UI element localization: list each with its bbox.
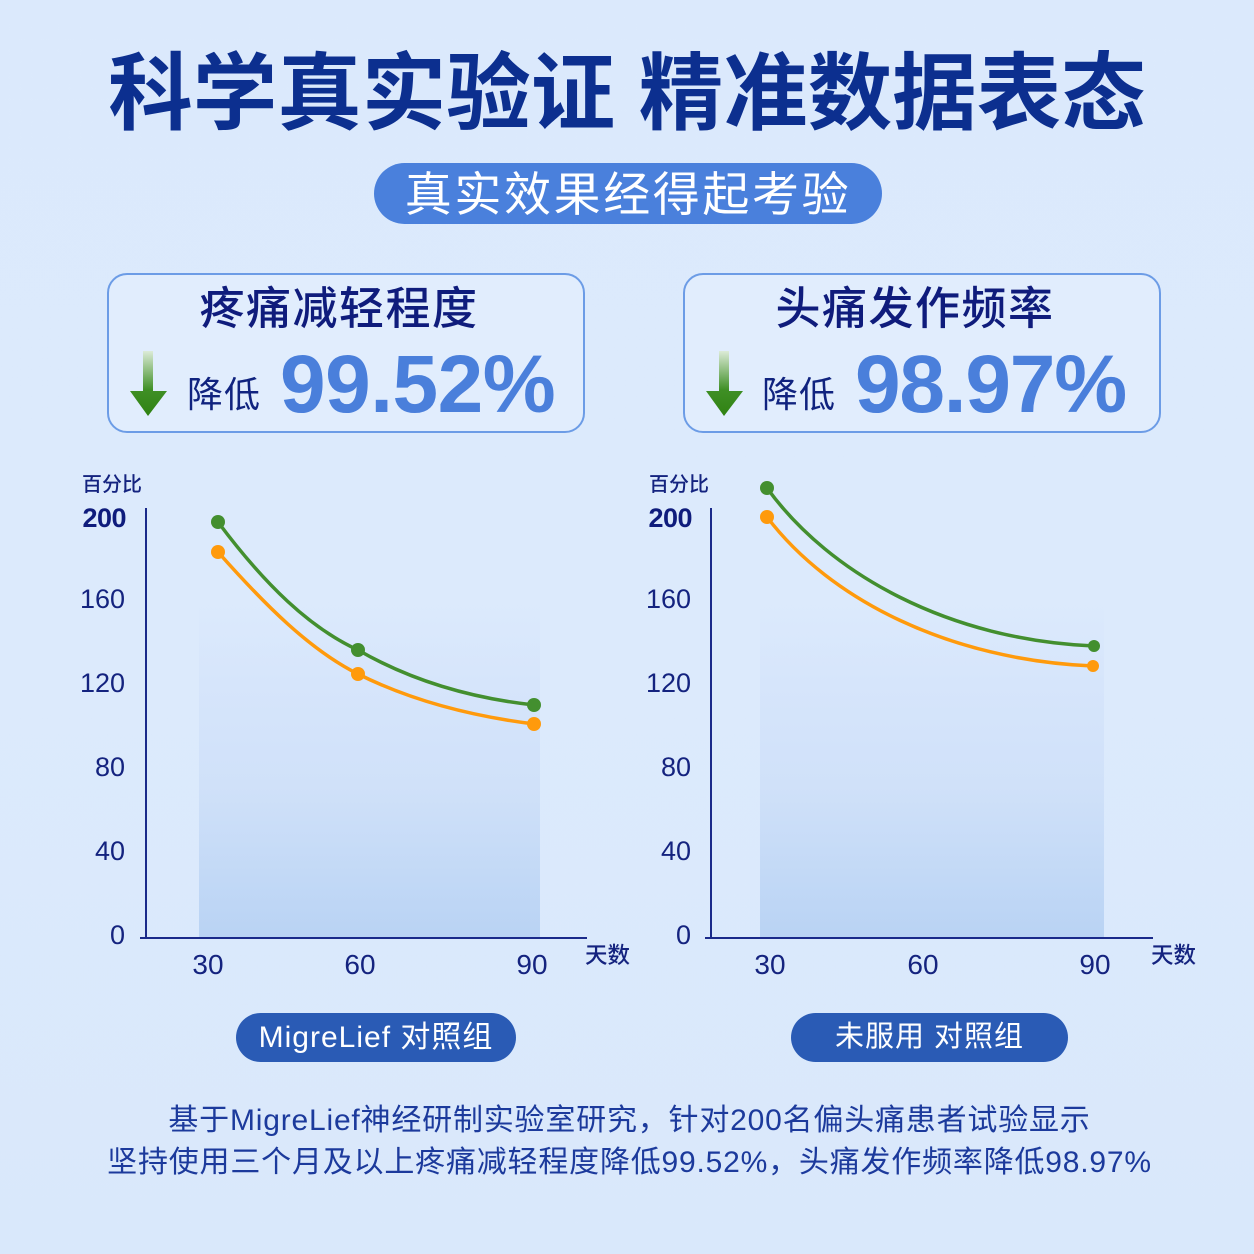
y axis labels: 200 [648,503,692,533]
panel: headache frequency [683,273,1161,433]
axes [140,508,587,938]
subtitle pill: 真实效果经得起考验 [405,168,851,221]
axes [705,508,1153,938]
green curve [760,481,1100,652]
chart: left [80,473,630,980]
reduce label: 降低 [762,374,836,415]
footnote: 基于MigreLief神经研制实验室研究，针对200名偏头痛患者试验显示 [168,1104,1091,1137]
y axis labels: 80 [661,752,691,782]
legend pill: untreated: 未服用 对照组 [835,1021,1024,1053]
panel heading: 头痛发作频率 [775,283,1054,334]
y axis labels [646,503,692,950]
icon: down arrow [130,351,167,416]
reduce label: 降低 [187,374,261,415]
x axis labels: 30 [754,949,786,980]
orange curve [760,510,1099,672]
panel: pain reduction [107,273,585,433]
shaded area [760,600,1104,938]
chart: right [646,473,1196,980]
y axis labels: 40 [661,836,691,866]
legend pill: MigreLief: MigreLief 对照组 [259,1021,493,1054]
y axis labels: 120 [80,668,125,698]
y axis labels: 160 [80,584,125,614]
x axis labels: 30 [192,949,224,980]
x axis title: 天数 [585,943,630,968]
y axis title: 百分比 [82,473,142,496]
y axis labels [80,503,126,950]
y axis labels: 160 [646,584,691,614]
shaded area [199,600,540,938]
x axis labels: 60 [907,949,939,980]
x axis labels: 60 [344,949,376,980]
y axis title: 百分比 [649,473,709,496]
stat value: 98.97% [855,339,1126,430]
y axis labels: 0 [110,920,125,950]
x axis labels [754,949,1111,980]
legend pill: MigreLief [236,1013,516,1062]
icon: down arrow [706,351,743,416]
footnote: 坚持使用三个月及以上疼痛减轻程度降低99.52%，头痛发作频率降低98.97% [107,1146,1152,1179]
panel heading: 疼痛减轻程度 [199,283,478,334]
stat value: 99.52% [280,339,555,430]
green curve [211,515,541,712]
x axis labels: 90 [516,949,548,980]
orange curve [211,545,541,731]
footnote [107,1104,1152,1179]
y axis labels: 80 [95,752,125,782]
y axis labels: 0 [676,920,691,950]
y axis labels: 120 [646,668,691,698]
y axis labels: 200 [82,503,126,533]
title: 科学真实验证 精准数据表态 [108,47,1146,141]
x axis labels: 90 [1079,949,1111,980]
x axis title: 天数 [1151,943,1196,968]
x axis labels [192,949,548,980]
legend pill: untreated [791,1013,1068,1062]
y axis labels: 40 [95,836,125,866]
